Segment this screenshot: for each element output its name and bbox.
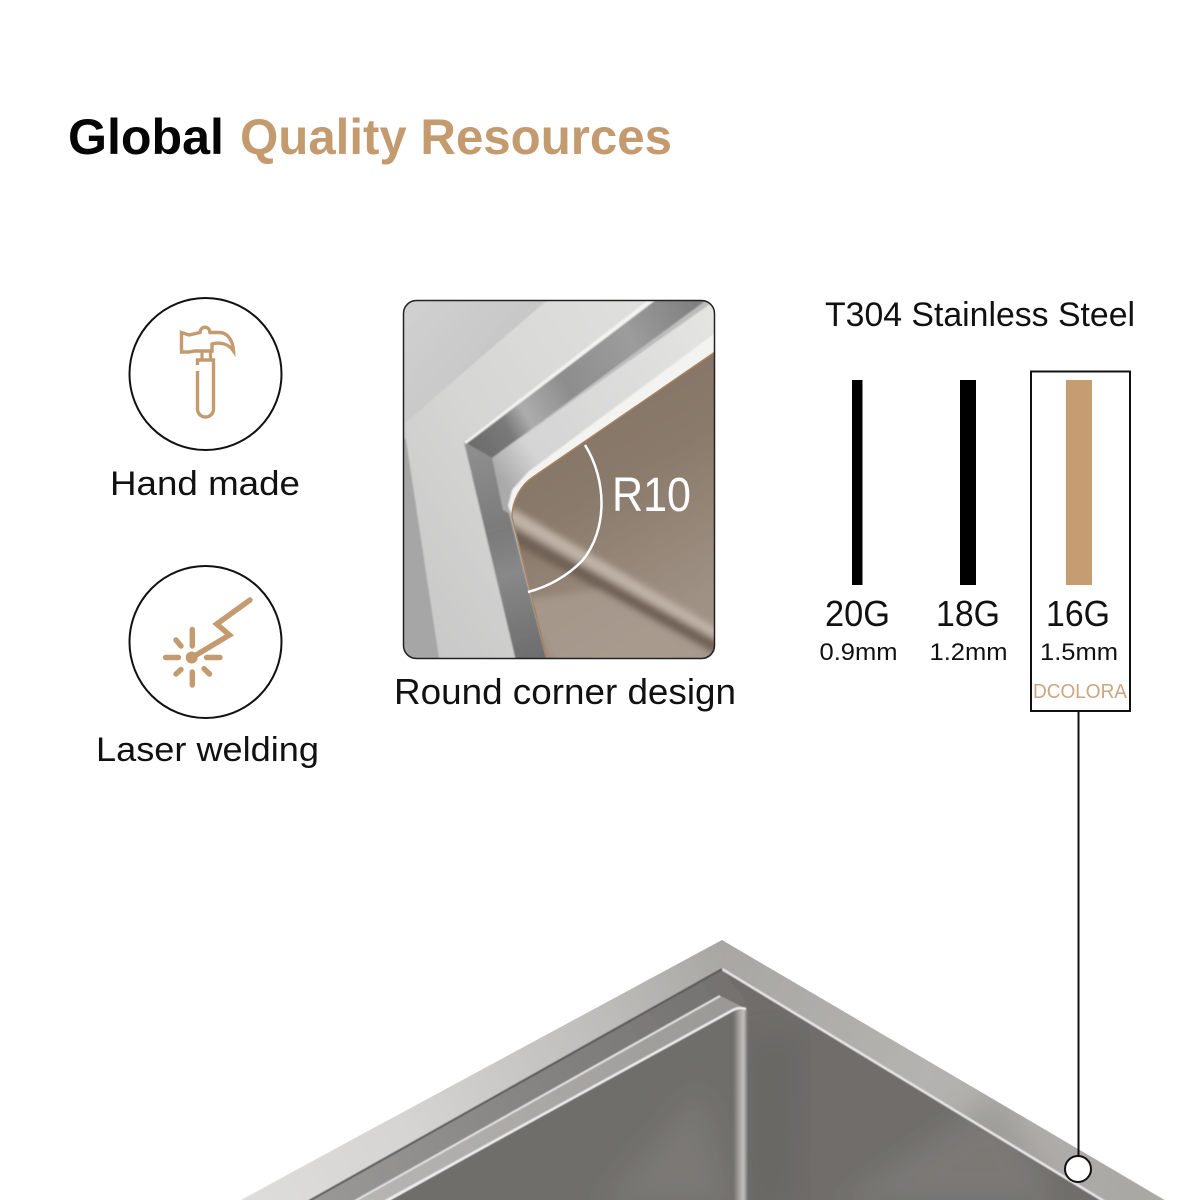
label: laser welding: Laser welding [96, 731, 319, 769]
title: Global [68, 109, 224, 165]
heading: steel: T304 Stainless Steel [825, 296, 1135, 334]
gauge: 16G highlighted [1031, 372, 1130, 711]
radius arc [528, 445, 602, 592]
sink corner photo [230, 936, 1175, 1200]
label: round corner design: Round corner design [394, 671, 736, 712]
gauge: 16G highlighted: 16G [1046, 593, 1110, 634]
gauge: 18G: 18G [936, 593, 1000, 634]
panel: round corner photo [395, 292, 725, 670]
gauge: 20G: 20G [825, 593, 890, 634]
callout line and marker [1065, 711, 1091, 1182]
gauge: 16G highlighted: DCOLORA [1033, 680, 1127, 703]
title: Quality Resources [240, 109, 672, 165]
gauge: 16G highlighted: 1.5mm [1040, 639, 1118, 666]
gauge: 18G [930, 380, 1008, 666]
icon: laser welding in circle [130, 566, 282, 718]
gauge: 20G [820, 380, 898, 666]
gauge: 20G: 0.9mm [820, 639, 898, 666]
icon: hammer in circle [130, 298, 282, 450]
label: R10: R10 [612, 469, 691, 522]
gauge: 18G: 1.2mm [930, 639, 1008, 666]
tinted basin [512, 354, 715, 659]
label: hand made: Hand made [110, 465, 300, 503]
